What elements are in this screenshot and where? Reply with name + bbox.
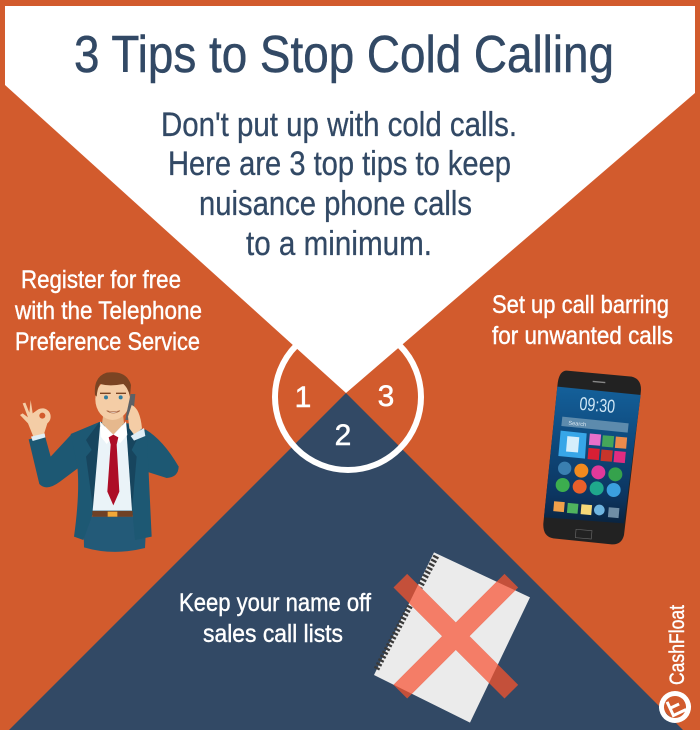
cross on navy xyxy=(400,581,511,692)
speaker xyxy=(593,381,605,383)
title: 3 Tips to Stop Cold Calling xyxy=(74,26,614,84)
tip 3 text: Set up call barring xyxy=(492,291,669,319)
shirt xyxy=(93,425,132,511)
phone xyxy=(125,394,135,420)
tie xyxy=(107,435,119,505)
icon: businessman on phone xyxy=(20,372,179,552)
belt xyxy=(92,511,133,517)
panel: white intro triangle xyxy=(5,6,695,393)
neck and head xyxy=(102,410,124,435)
square apps xyxy=(589,434,601,446)
collar xyxy=(100,421,127,444)
tip 2 text: Keep your name off xyxy=(179,589,371,617)
large app xyxy=(558,431,587,459)
hair xyxy=(95,372,131,397)
panel: blue triangle tip 2 xyxy=(9,393,683,730)
logo: CashFloat xyxy=(657,605,693,725)
intro text: Here are 3 top tips to keep xyxy=(168,145,511,183)
icon: crossed-out notebook xyxy=(374,552,530,723)
eyes xyxy=(104,395,108,399)
dock apps xyxy=(553,501,565,512)
spiral binding xyxy=(376,556,436,671)
tip 2 text: sales call lists xyxy=(203,620,343,648)
icon: smartphone xyxy=(543,371,641,544)
tip 1 text: Register for free xyxy=(21,266,181,294)
trousers xyxy=(83,517,147,552)
clock: 09:30 xyxy=(579,393,616,417)
intro text: Don't put up with cold calls. xyxy=(161,106,517,144)
intro text: to a minimum. xyxy=(246,225,432,263)
screen xyxy=(544,387,641,523)
icon: smartphone: Search xyxy=(568,421,586,428)
tip 1 text xyxy=(14,266,202,356)
number 1: 1 xyxy=(295,381,311,414)
notebook page xyxy=(374,552,530,723)
round apps xyxy=(558,462,571,475)
search bar xyxy=(561,417,629,433)
number circle ring xyxy=(275,324,421,470)
intro text xyxy=(161,106,517,263)
tip 2 text xyxy=(179,589,371,648)
tip 3 text xyxy=(492,291,673,350)
number 3: 3 xyxy=(378,380,394,413)
logo wordmark: CashFloat xyxy=(666,605,689,685)
ok hand xyxy=(20,400,51,437)
phone hand xyxy=(128,405,142,435)
tip 1 text: Preference Service xyxy=(15,328,200,356)
smile xyxy=(107,411,120,413)
cross on page xyxy=(400,581,511,692)
home button xyxy=(575,529,592,539)
tip 3 text: for unwanted calls xyxy=(492,322,673,350)
tip 1 text: with the Telephone xyxy=(14,297,202,325)
number 2: 2 xyxy=(335,419,351,452)
logo mark xyxy=(657,689,693,725)
right sleeve xyxy=(132,429,179,478)
phone body xyxy=(543,371,641,544)
jacket xyxy=(71,422,152,540)
left sleeve xyxy=(29,434,80,487)
lapels xyxy=(86,422,137,511)
intro text: nuisance phone calls xyxy=(199,185,472,223)
